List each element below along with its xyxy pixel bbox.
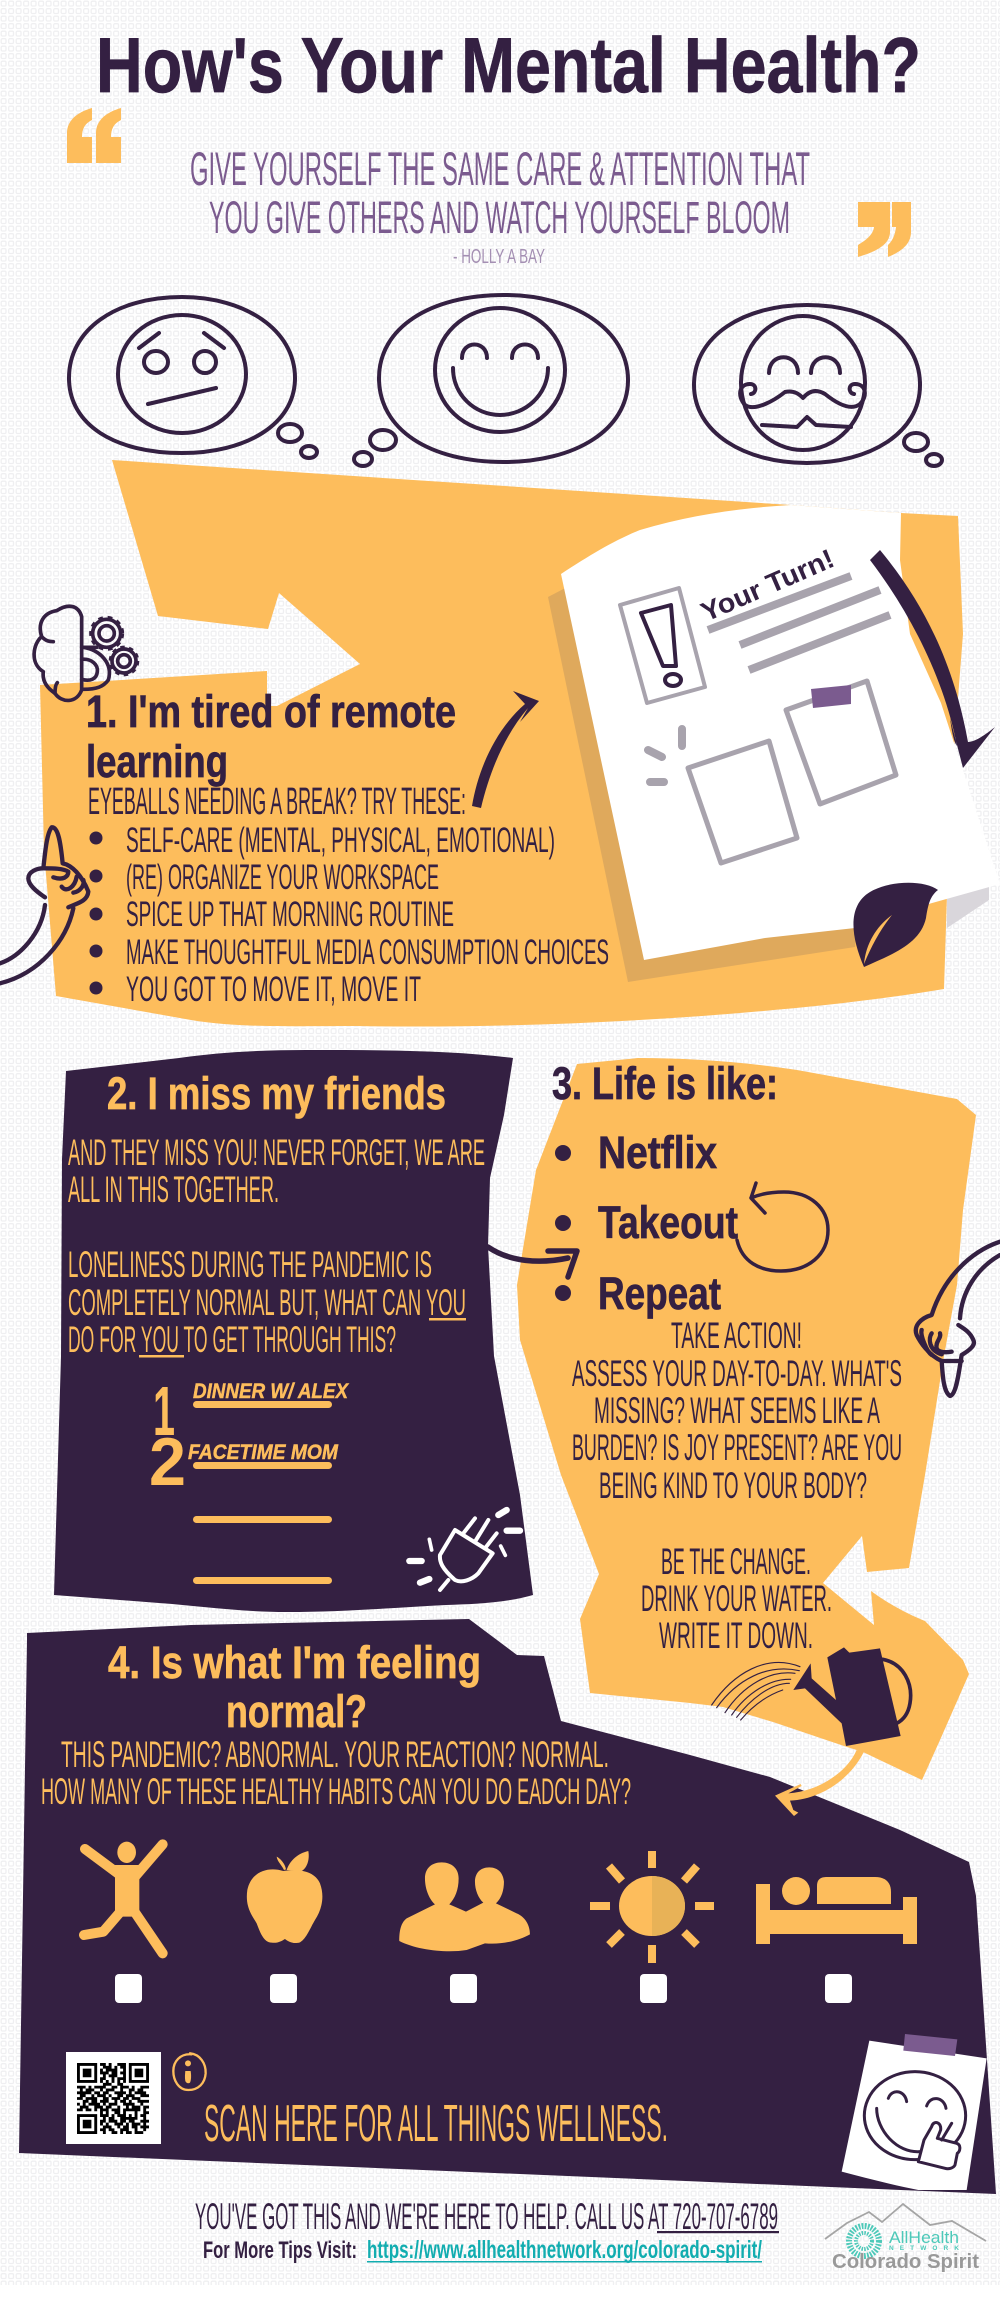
paragraph 2: DO FOR YOU TO GET THROUGH THIS?	[68, 1319, 396, 1360]
worksheet paper	[561, 505, 1000, 960]
panel 3 text	[552, 1058, 902, 1656]
paragraph 2	[68, 1244, 466, 1360]
note: thumbs up smile	[842, 2034, 987, 2190]
panel 4: dark	[19, 1619, 996, 2194]
icon: hand pointing up	[0, 827, 88, 983]
icon: jumping person	[84, 1842, 163, 1953]
quote attribution: - HOLLY A BAY	[453, 246, 545, 268]
bullet list: YOU GOT TO MOVE IT, MOVE IT	[126, 970, 421, 1009]
panel 2: dark	[54, 1050, 533, 1612]
blank note right	[786, 681, 896, 804]
Your Turn label: Your Turn!	[696, 543, 839, 628]
icon: bed	[756, 1877, 917, 1944]
exclamation card	[620, 588, 705, 703]
purple tape	[811, 685, 851, 708]
worksheet shadow	[548, 570, 860, 982]
curved orange arrow to panel 4	[775, 1750, 864, 1816]
routine list: Takeout	[598, 1197, 738, 1248]
numbered to-do list: 1	[153, 1372, 175, 1450]
icon: brain and gears	[34, 606, 138, 700]
curved arrow to worksheet	[472, 691, 539, 808]
paragraph 1: ALL IN THIS TOGETHER.	[68, 1169, 279, 1210]
heading 4: 4. Is what I'm feeling	[108, 1637, 481, 1688]
logo: AllHealth Network Colorado Spirit: AllHealth	[889, 2228, 959, 2247]
icon: leaf	[853, 883, 938, 967]
paragraph 1	[68, 1132, 485, 1210]
panel 1 text: learning	[86, 736, 228, 787]
be the change paragraph: BE THE CHANGE.	[661, 1541, 811, 1582]
heading 1: 1. I'm tired of remote	[86, 686, 456, 737]
checkboxes	[115, 1974, 852, 2003]
bullet list: SELF-CARE (MENTAL, PHYSICAL, EMOTIONAL)	[126, 821, 555, 860]
icon: info	[173, 2053, 206, 2090]
take action paragraph	[572, 1315, 902, 1506]
smiley	[864, 2072, 966, 2160]
be the change paragraph	[641, 1541, 832, 1656]
note tape	[903, 2034, 957, 2056]
icon: closing quote mark	[858, 202, 911, 257]
placeholder lines	[708, 576, 890, 670]
icon: hand pointing down	[916, 1242, 1000, 1396]
panel 2 text: COMPLETELY NORMAL BUT, WHAT CAN YOU	[68, 1282, 466, 1323]
spark dashes	[648, 729, 682, 782]
note paper	[842, 2041, 987, 2190]
thumb	[918, 2123, 960, 2169]
panel 4 text: normal?	[226, 1686, 367, 1737]
panel 1 text: EYEBALLS NEEDING A BREAK? TRY THESE:	[88, 781, 466, 823]
infographic canvas: AND THEY MISS YOU! NEVER FORGET, WE ARE	[68, 1132, 485, 1173]
panel 4 text	[41, 1637, 631, 1812]
footer link line: https://www.allhealthnetwork.org/colorado-spirit/	[367, 2236, 762, 2264]
icon: two people	[399, 1862, 530, 1951]
teal burst	[849, 2226, 879, 2256]
bullet list: (RE) ORGANIZE YOUR WORKSPACE	[126, 858, 439, 897]
thought bubble: worried face	[69, 297, 317, 458]
numbered to-do list	[149, 1372, 350, 1584]
panel 3: orange	[517, 1058, 976, 1780]
arrow down along worksheet	[870, 550, 995, 768]
take action paragraph: TAKE ACTION!	[671, 1315, 802, 1356]
panel 2 text	[68, 1068, 485, 1584]
logo: AllHealth Network Colorado Spirit: NETWORK	[889, 2245, 959, 2252]
routine list	[555, 1127, 738, 1319]
bullet list: SPICE UP THAT MORNING ROUTINE	[126, 895, 454, 934]
footer link line	[203, 2236, 762, 2264]
QR code	[66, 2052, 161, 2144]
arrow from panel 2 to panel 3	[488, 1247, 577, 1277]
numbered to-do list: FACETIME MOM	[188, 1441, 338, 1464]
numbered to-do list: DINNER W/ ALEX	[193, 1380, 350, 1403]
panel 1 worksheet	[548, 505, 1000, 982]
logo: AllHealth Network Colorado Spirit: Colorado Spirit	[832, 2251, 979, 2273]
icon: plug	[409, 1510, 520, 1590]
paragraph 2: LONELINESS DURING THE PANDEMIC IS	[68, 1244, 432, 1285]
routine list: Netflix	[598, 1127, 717, 1178]
be the change paragraph: WRITE IT DOWN.	[659, 1615, 813, 1656]
grey corner shadow	[947, 877, 989, 928]
icon: apple	[247, 1851, 322, 1943]
heading 2: 2. I miss my friends	[107, 1068, 446, 1119]
panel 1 text	[86, 686, 609, 1009]
numbered to-do list: 2	[149, 1424, 186, 1500]
heading 3: 3. Life is like:	[552, 1058, 778, 1109]
routine list: Repeat	[598, 1268, 721, 1319]
logo: AllHealth Network Colorado Spirit	[825, 2204, 986, 2273]
icon: opening quote mark	[67, 108, 121, 163]
thought bubble: smiling face	[354, 295, 628, 466]
icon: sun	[590, 1851, 714, 1963]
mountain outline	[825, 2204, 986, 2241]
quote block	[67, 108, 911, 268]
bullet list	[90, 821, 609, 1009]
footer link line: For More Tips Visit:	[203, 2237, 357, 2264]
icon: repeat loop	[737, 1183, 828, 1271]
thought bubble: moustache face	[694, 305, 942, 466]
blank note left	[688, 741, 797, 863]
panel 1: orange torn paper with arrow notch	[40, 460, 963, 1027]
icon: watering can with water arcs	[712, 1647, 911, 1746]
